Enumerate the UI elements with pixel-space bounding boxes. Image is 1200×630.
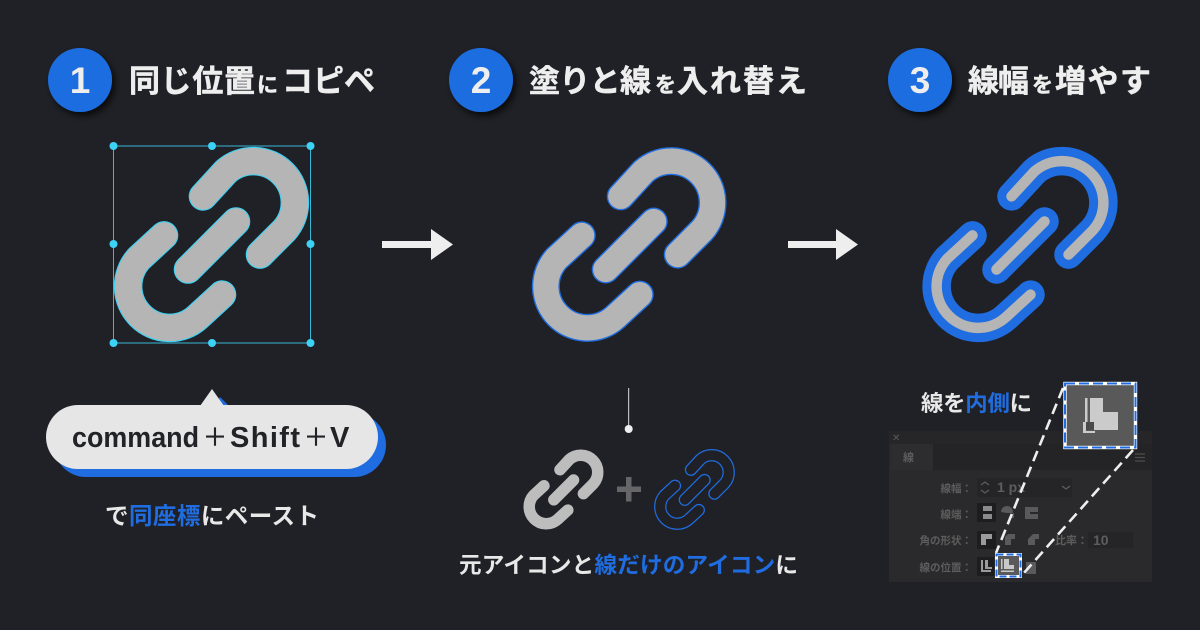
step 1 heading: 同じ位置 <box>129 64 255 99</box>
panel tab <box>891 444 933 470</box>
arrow 1 <box>382 229 453 260</box>
callout: keyboard shortcut: command <box>72 422 199 454</box>
caption: original icon plus stroke-only icon: 元アイコンと線だけのアイコンに <box>459 553 798 578</box>
row: corner shape: 10 <box>1093 532 1109 548</box>
step 2 heading: 2 <box>471 60 491 101</box>
step 3 heading: 3 <box>910 60 930 101</box>
step 3 heading: を <box>1032 74 1053 97</box>
panel tab: 線 <box>903 450 914 464</box>
step 2 heading: を <box>655 74 676 97</box>
row: stroke width: 1 px <box>997 479 1025 495</box>
panel: stroke settings: ✕ <box>892 433 900 444</box>
row: corner shape: 角の形状： <box>920 534 972 547</box>
panel: stroke settings <box>889 431 1152 582</box>
step 2 heading: 塗りと線 <box>529 64 651 99</box>
icon: link with thin blue stroke <box>546 161 713 328</box>
step 1 heading: コピペ <box>282 64 375 99</box>
dashed zoom lines <box>996 388 1133 574</box>
row: corner shape <box>920 531 1133 549</box>
callout: keyboard shortcut: ＋ <box>202 424 228 452</box>
icon: small outlined link <box>660 455 729 524</box>
step 1 heading: に <box>257 74 278 97</box>
step 1 heading: 1 <box>70 60 90 101</box>
magnified button <box>1065 384 1136 448</box>
row: stroke position: 線の位置： <box>920 561 972 574</box>
callout: keyboard shortcut <box>46 389 386 477</box>
callout: keyboard shortcut: V <box>330 422 350 454</box>
row: stroke width: 線幅： <box>940 482 972 495</box>
row: stroke width <box>940 478 1072 497</box>
row: stroke caps: 線端： <box>940 508 972 521</box>
caption: paste at same coordinates: で同座標にペースト <box>105 503 319 529</box>
callout: keyboard shortcut: ＋ <box>304 424 329 452</box>
step 3 heading: 増やす <box>1055 64 1151 99</box>
icon: plus <box>617 477 641 502</box>
step 1 heading <box>48 48 375 112</box>
icon: selected link with bounding box <box>110 142 314 347</box>
arrow 2 <box>788 229 858 260</box>
row: stroke caps <box>940 503 1038 522</box>
step 3 heading <box>888 48 1151 112</box>
step 2 heading: 入れ替え <box>677 64 807 99</box>
step 2 heading <box>449 48 807 112</box>
connector line with dot <box>625 388 633 433</box>
row: stroke position <box>920 557 1036 576</box>
icon: small gray link <box>529 455 598 524</box>
caption: inside stroke: 線を内側に <box>921 391 1032 416</box>
callout: keyboard shortcut: Shift <box>230 422 300 454</box>
small highlighted button <box>996 554 1020 576</box>
icon: link with thick blue stroke <box>937 161 1103 328</box>
row: corner shape: 比率： <box>1055 533 1088 547</box>
step 3 heading: 線幅 <box>968 64 1029 99</box>
